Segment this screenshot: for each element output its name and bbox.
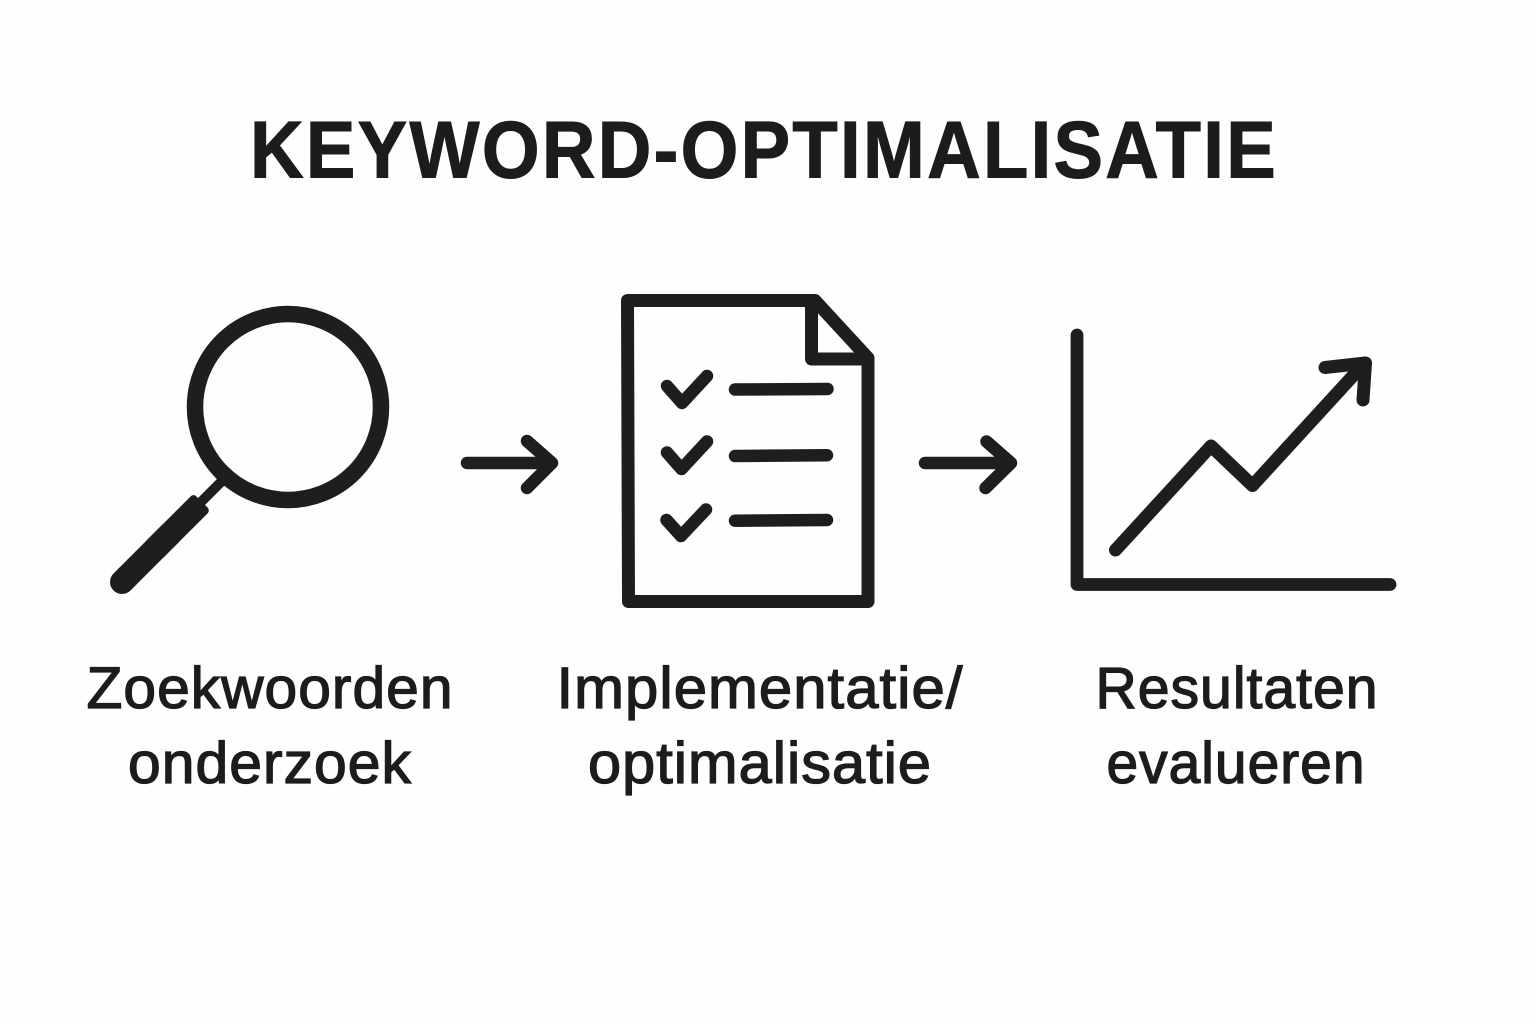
icon: growth chart <box>1077 335 1390 584</box>
label: Zoekwoorden onderzoek <box>86 656 454 796</box>
icon: magnifying glass <box>122 314 381 582</box>
title: KEYWORD-OPTIMALISATIE <box>250 106 1278 196</box>
check item 3 <box>666 510 827 536</box>
arrow: implementation to results <box>925 442 1011 488</box>
icon: checklist document <box>628 300 868 602</box>
label: Zoekwoorden onderzoek: Zoekwoorden <box>86 656 454 721</box>
label: Resultaten evalueren <box>1096 656 1378 796</box>
label: Implementatie/optimalisatie <box>556 656 964 796</box>
label: Resultaten evalueren: Resultaten <box>1096 656 1378 721</box>
check item 1 <box>667 376 828 403</box>
label: Implementatie/optimalisatie: optimalisatie <box>588 731 932 796</box>
label: Implementatie/optimalisatie: Implementatie/ <box>556 656 964 721</box>
label: Resultaten evalueren: evalueren <box>1106 731 1366 796</box>
check item 2 <box>667 442 827 469</box>
label: Zoekwoorden onderzoek: onderzoek <box>128 731 412 796</box>
arrow: research to implementation <box>467 441 552 488</box>
